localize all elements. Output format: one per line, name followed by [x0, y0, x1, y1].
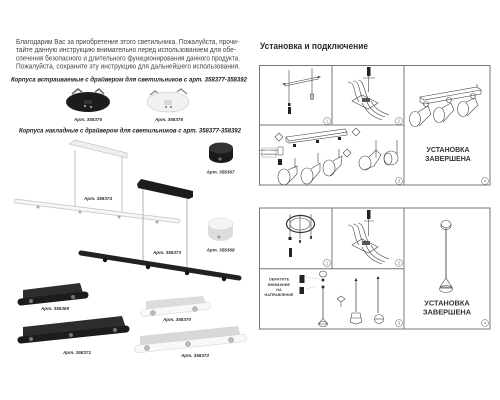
completion label: [425, 147, 471, 163]
intro text: Пожалуйста, сохраните эту инструкцию для дальнейшего использования.: [16, 62, 240, 70]
intro text: спечения безопасного и длительного функционирования данного продукта.: [16, 54, 240, 62]
step 4 number: [482, 178, 488, 184]
step 2: wire connector: [348, 210, 389, 264]
step 4 number: 4: [484, 179, 487, 184]
step 3: lamp heads assembly: [259, 128, 398, 185]
step 3 number: [396, 178, 402, 184]
step 1 number: [324, 118, 330, 124]
step 4: assembled fixture: [410, 84, 481, 126]
product: black pendant 358373: [81, 179, 239, 281]
product: black plate 358371: [21, 316, 126, 355]
step 2 number: [396, 118, 402, 124]
product: black plate 358369: Арт. 358369: [40, 306, 69, 311]
product: black recessed disc 358375: Арт. 358375: [73, 117, 102, 122]
step 3 number: [396, 320, 402, 326]
product: black recessed disc 358375: [66, 89, 110, 122]
step 3: lamp heads assembly: НА НАПРАВЛЕНИЕ: [261, 153, 278, 156]
product: black cylinder 358367: [205, 142, 235, 174]
product: black plate 358371: Арт. 358371: [62, 350, 91, 355]
product: black pendant 358373: Арт. 358373: [152, 250, 181, 255]
product: white plate 358372: [138, 326, 243, 358]
intro text: Благодарим Вас за приобретение этого светильника. Пожалуйста, прочи-: [16, 38, 240, 46]
completion label: ЗАВЕРШЕНА: [425, 156, 471, 163]
step 4 number: 4: [484, 321, 487, 326]
step 2: wire connector: [348, 67, 389, 120]
completion label: УСТАНОВКА: [426, 147, 470, 154]
product: white plate 358370: [144, 296, 207, 322]
product: black cylinder 358367: Арт. 358367: [205, 170, 235, 174]
diagram panel: single pendant installation: [260, 208, 490, 329]
step 4: assembled pendant: [440, 220, 452, 292]
intro text: тайте данную инструкцию внимательно перед использованием для обе-: [16, 46, 237, 54]
product: white cylinder 358368: [205, 218, 235, 252]
step 2 number: [396, 260, 402, 266]
step 3: attention note and pendant parts: НА: [276, 288, 282, 292]
completion label: [423, 298, 472, 316]
step 2 number: 2: [398, 261, 401, 266]
completion label: ЗАВЕРШЕНА: [423, 308, 472, 316]
product: white pendant 358374: [16, 140, 178, 224]
step 1 number: [324, 260, 330, 266]
step 3: attention note and pendant parts: НАПРАВЛЕНИЕ: [265, 293, 294, 297]
step 1: canopy and wires: [282, 68, 321, 114]
product: white cylinder 358368: Арт. 358368: [205, 248, 235, 252]
heading: recessed housings: Корпуса встраиваемые с драйвером для светильников с арт. 358377-358392: [11, 76, 247, 84]
product: white recessed disc 358376: [147, 89, 189, 122]
step 1 number: 1: [326, 261, 329, 266]
completion label: УСТАНОВКА: [424, 298, 470, 308]
step 3: attention note and pendant parts: ОБРАТИТЕ: [269, 278, 290, 282]
heading: surface housings: Корпуса накладные с драйвером для светильников с арт. 358377-358392: [19, 126, 241, 134]
product: white plate 358372: Арт. 358372: [180, 353, 209, 358]
step 3: attention note and pendant parts: ВНИМАНИЕ: [268, 283, 291, 287]
step 3 number: 3: [398, 179, 401, 184]
title: installation and connection: Установка и подключение: [260, 41, 368, 52]
step 3 number: 3: [398, 321, 401, 326]
diagram panel: track installation: [259, 66, 490, 185]
product: white plate 358370: Арт. 358370: [162, 317, 191, 322]
step 1: ring canopy: [286, 214, 314, 257]
step 4 number: [482, 320, 488, 326]
product: white recessed disc 358376: Арт. 358376: [154, 117, 183, 122]
step 1 number: 1: [326, 119, 329, 124]
product: white pendant 358374: Арт. 358374: [83, 196, 112, 201]
panel frame: [260, 208, 490, 329]
step 3: attention note and pendant parts: [265, 271, 384, 326]
product: black plate 358369: [21, 283, 85, 311]
intro text: [16, 38, 240, 70]
step 2 number: 2: [398, 119, 401, 124]
step 3: lamp heads assembly: ОБРАТИТЕ ВНИМАНИЕ: [259, 149, 280, 152]
panel frame: [260, 66, 490, 185]
